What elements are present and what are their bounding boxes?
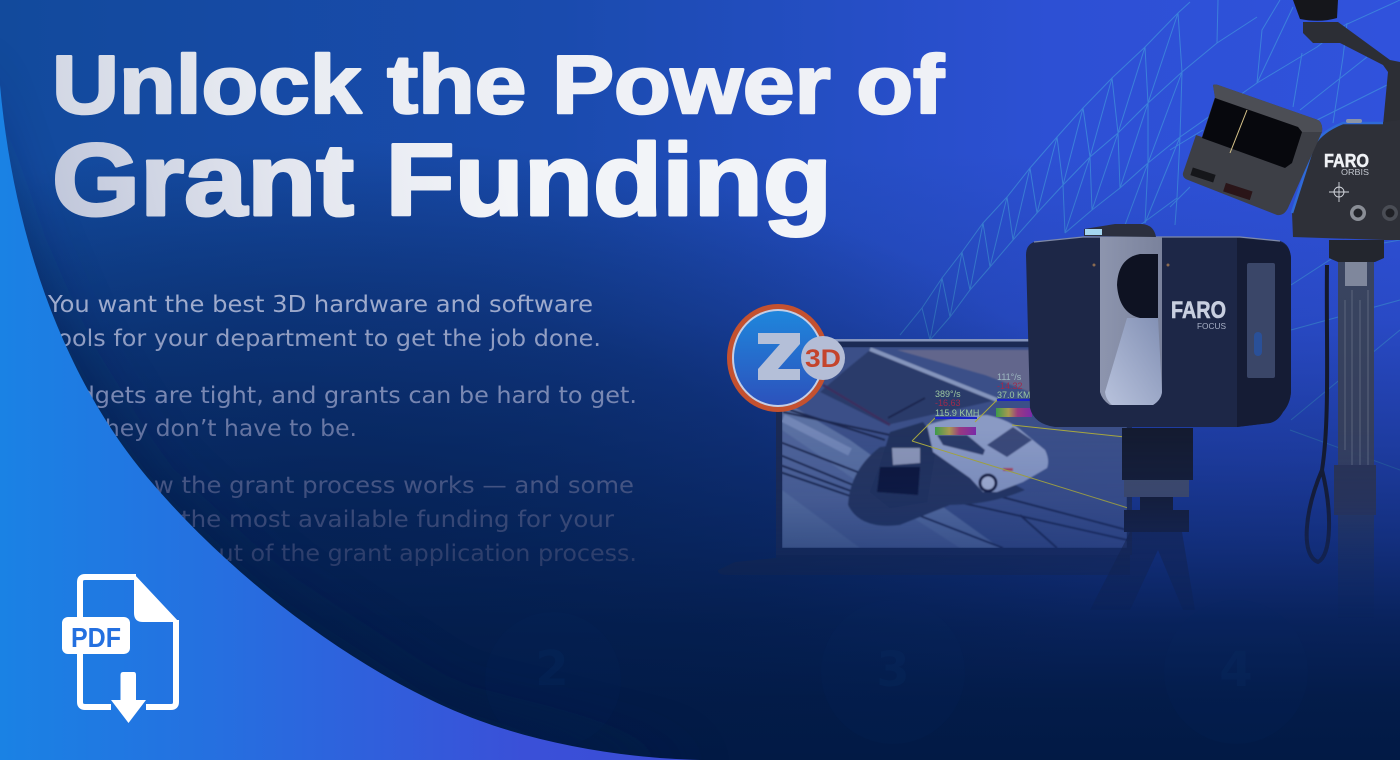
status dots [1092,264,1096,266]
body text [47,292,637,567]
Focus logo text: FARO [1171,297,1226,324]
swoosh shadow [0,60,700,760]
head buttons [1346,119,1362,123]
speed labels: 37.0 KMH [997,390,1037,400]
collar [1329,240,1384,262]
crosshair [1329,182,1349,202]
color bars [935,427,976,435]
right panel [1237,238,1291,427]
equipment group, fading to the bottom [718,0,1400,618]
pole [1338,258,1374,618]
faint numbered circles [485,600,1308,748]
speed labels [935,374,1030,416]
title: Unlock the Power of [52,38,944,131]
faint numbered circles: 3 [876,642,910,698]
laptop base [718,555,1130,575]
Z3D logo [727,304,845,412]
download arrow [111,672,146,723]
tripod [1090,428,1195,610]
dark car [886,422,930,447]
FARO Orbis scanner [1183,0,1400,618]
faint numbered circles: 4 [1219,642,1253,698]
laptop with crash reconstruction [718,339,1132,575]
body text: tips to get the most available funding for your [48,507,615,533]
lidar lens [1202,98,1302,168]
laptop lid [776,341,1132,555]
speed labels: -16.63 [935,398,961,408]
triangular mesh lines [900,0,1400,470]
head blue edge [1292,123,1383,213]
body text: tools for your department to get the job done. [48,326,601,352]
lidar rim [1213,84,1322,132]
body text: Budgets are tight, and grants can be hard to get. [48,383,637,409]
FARO Focus scanner: FOCUS [1197,321,1226,331]
body text: But they don’t have to be. [48,416,357,442]
handle grip [1293,0,1338,21]
reconstruction screen [780,347,1128,548]
title [52,38,944,237]
body text: department, out of the grant application process. [48,541,637,567]
PDF download icon: PDF [71,622,121,653]
Orbis logo text: FARO [1324,151,1369,171]
FARO Focus scanner [1026,224,1291,610]
Z letter [758,333,800,380]
light lower panel [1105,318,1162,405]
logo ring [727,304,829,412]
measurement lines [912,400,1128,508]
PDF download icon [62,574,179,723]
body text: Learn how the grant process works — and some [48,473,634,499]
scanner body [1026,237,1291,427]
connectors [1350,205,1366,221]
speed labels: 389°/s [935,389,961,399]
handle arm [1303,22,1400,125]
3D badge [801,336,845,380]
top light edge [1034,237,1280,242]
Z3D logo: 3D [805,345,841,373]
folded corner [134,574,179,622]
speed labels: 111°/s [997,372,1022,382]
car shadow [848,440,1025,526]
faint numbered circles: 2 [535,641,569,697]
speed labels: -14.32 [997,381,1023,391]
FARO Orbis scanner: ORBIS [1341,168,1369,177]
body text: You want the best 3D hardware and software [47,292,593,318]
PDF tag [62,617,130,654]
lidar unit [1183,84,1322,215]
silver center [1100,237,1162,405]
speed labels: 115.9 KMH [935,408,979,418]
blue corner swoosh [0,85,700,760]
white car [927,415,1048,492]
top cap [1084,224,1156,237]
document outline [80,577,176,707]
lens [1117,254,1158,318]
lanyard cord [1307,265,1329,562]
display panel [1247,263,1275,378]
title: Grant Funding [52,123,832,237]
head body [1292,120,1400,240]
